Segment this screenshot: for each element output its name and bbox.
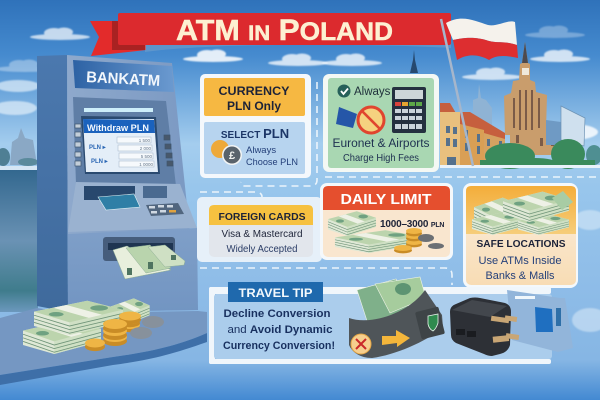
ATM screen: Withdraw PLN: [87, 123, 149, 134]
currency card: [204, 78, 305, 116]
icon: calculator: [392, 87, 426, 133]
bank card: [98, 194, 140, 210]
ATM machine: [37, 55, 198, 312]
tip badge: TRAVEL TIP: [238, 286, 312, 300]
city skyline behind the ATM: [0, 128, 38, 312]
clouds: [0, 26, 600, 332]
glass tower: [546, 106, 585, 146]
select PLN card: SELECT PLN: [221, 126, 289, 141]
cash slot with notes: [103, 237, 185, 279]
panel: euronet warning: [323, 74, 439, 172]
panel: safe locations: SAFE LOCATIONS: [476, 238, 566, 250]
panel: euronet warning: Charge High Fees: [343, 152, 419, 164]
panel: safe locations: Use ATMs Inside: [478, 255, 562, 267]
ATM header plate: BANKATM: [86, 69, 161, 90]
tip badge: [228, 282, 323, 302]
panel: euronet warning: Always: [354, 86, 391, 98]
white band around foreign cards: [197, 197, 322, 262]
select PLN card: Choose PLN: [246, 157, 298, 168]
ATM screen: 1 500: [139, 138, 150, 143]
pavement curb: [0, 308, 207, 375]
keypad: [146, 203, 184, 216]
panel: travel tip: Decline Conversion: [224, 308, 331, 320]
arrow: [382, 330, 410, 347]
panel: foreign cards: Visa & Mastercard: [222, 229, 302, 240]
trees: [480, 139, 600, 169]
ATM front body: [67, 55, 198, 312]
ATM screen: [81, 116, 160, 174]
city illustration top right: [410, 42, 600, 169]
ATM side panel: [37, 55, 68, 312]
ATM side buttons: [75, 124, 173, 166]
icon: check: [338, 84, 350, 98]
travel adapter: [450, 298, 519, 356]
ATM screen: 2 000: [140, 146, 151, 151]
polish flag: [441, 19, 518, 166]
icon: decline mark: [351, 334, 371, 354]
wallet with cash: [349, 277, 445, 358]
icon: prohibited fee: [358, 107, 384, 133]
mini ATM: [507, 290, 573, 352]
ATM screen: PLN ▸: [89, 145, 107, 151]
panel: travel tip: [209, 277, 573, 364]
cash illustration: [328, 211, 444, 253]
ATM screen: 5 500: [141, 154, 152, 159]
panel: foreign cards: [209, 205, 313, 257]
panel: foreign cards: FOREIGN CARDS: [218, 212, 306, 223]
panel: daily limit: DAILY LIMIT: [340, 192, 432, 208]
panel: daily limit: [320, 183, 453, 260]
panel: currency and select PLN: [200, 74, 311, 178]
cash illustration: [472, 191, 573, 235]
pile of banknotes and coins: [23, 298, 164, 354]
old town houses: [440, 103, 505, 165]
currency card: PLN Only: [227, 99, 281, 113]
select PLN card: [204, 122, 305, 174]
distant skyscraper: [473, 84, 492, 143]
panel: foreign cards: Widely Accepted: [226, 244, 298, 255]
panel: euronet warning: Euronet & Airports: [332, 138, 430, 150]
select PLN card: Always: [246, 145, 276, 156]
panel: travel tip: and Avoid Dynamic: [228, 324, 332, 336]
panel: safe locations: [463, 183, 578, 288]
panel: daily limit: 1000–3000 PLN: [380, 219, 444, 230]
palace of culture: [504, 42, 561, 155]
title banner: [90, 13, 451, 56]
title text: ATM IN POLAND: [176, 14, 393, 47]
distant tv tower: [410, 50, 418, 73]
panel: travel tip: Currency Conversion!: [223, 340, 335, 352]
panel: safe locations: Banks & Malls: [486, 270, 555, 282]
ATM header plate: [73, 60, 174, 92]
dashed connectors: [200, 82, 600, 285]
ATM screen: 1 0000: [139, 162, 153, 167]
currency card: CURRENCY: [218, 84, 290, 98]
icon: coins: £: [229, 150, 235, 162]
icon: EU card: [336, 107, 357, 128]
ATM screen: PLN ▸: [91, 159, 109, 165]
